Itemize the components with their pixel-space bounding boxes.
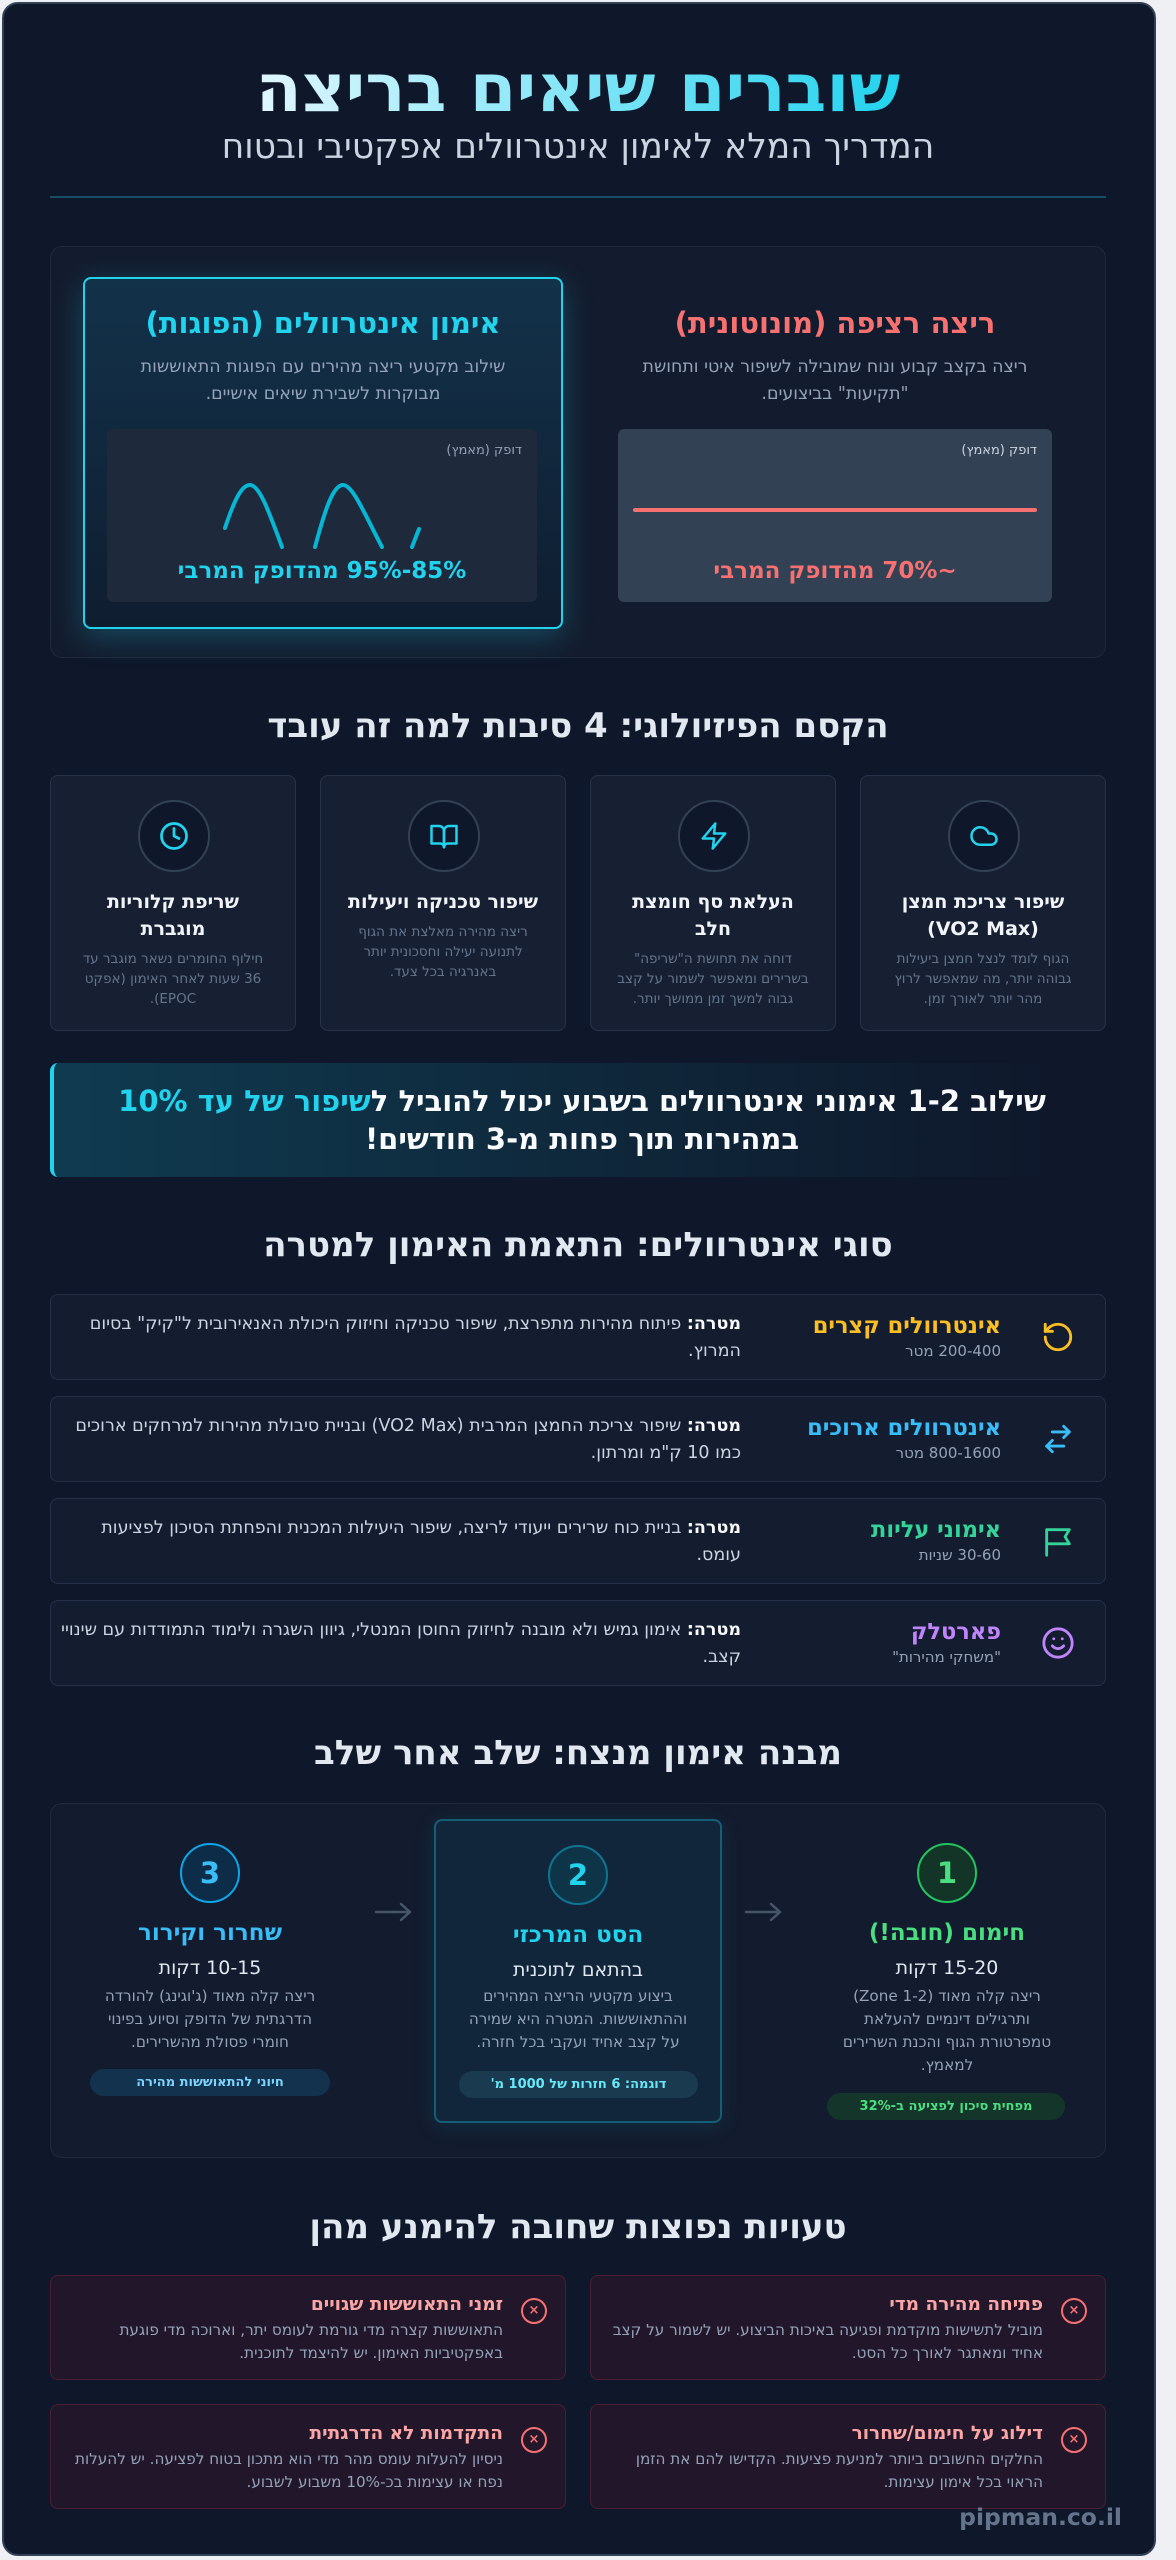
watermark: pipman.co.il — [959, 2503, 1122, 2531]
mistake: non-gradual progress: התקדמות לא הדרגתית — [310, 2423, 503, 2444]
text: 3 — [200, 1856, 220, 1890]
card: VO2 max: גבוהה יותר, מה שמאפשר לרוץ — [895, 971, 1071, 987]
row: long intervals — [50, 1396, 1106, 1482]
card: lactate threshold: גבוה למשך זמן ממושך יותר. — [633, 991, 793, 1007]
card: interval training — [83, 277, 563, 629]
mistake: skipping warm-up: החלקים החשובים ביותר למניעת פציעות. הקדישו להם את הזמן — [636, 2450, 1043, 2468]
subtitle: המדריך המלא לאימון אינטרוולים אפקטיבי ובטוח — [222, 127, 934, 167]
text: מפחית סיכון לפציעה ב-32% — [860, 2099, 1032, 2114]
middle step highlight — [434, 1819, 722, 2123]
mistake: non-gradual progress: ניסיון להעלות עומס מהר מדי הוא מתכון בטוח לפציעה. יש להעלות — [75, 2450, 503, 2468]
mistake: too fast start: × — [1069, 2303, 1079, 2318]
row: short intervals — [50, 1294, 1106, 1380]
card: lactate threshold: העלאת סף חומצת — [632, 891, 794, 913]
row: hills: 30-60 שניות — [919, 1546, 1001, 1564]
mistake: too fast start: פתיחה מהירה מדי — [889, 2294, 1043, 2315]
callout banner: במהירות תוך פחות מ-3 חודשים! — [365, 1122, 799, 1156]
card: VO2 max: הגוף לומד לנצל חמצן ביעילות — [897, 951, 1069, 967]
mistake: wrong recovery: × — [529, 2303, 539, 2318]
mistake: too fast start — [590, 2275, 1106, 2380]
card: VO2 max: שיפור צריכת חמצן — [902, 891, 1064, 913]
row: fartlek: מטרה: אימון גמיש ולא מובנה לחיזוק החוסן המנטלי, גיוון השגרה ולימוד התמודדות עם שינויי — [61, 1620, 741, 1640]
text: ריצה קלה מאוד (Zone 1-2) — [853, 1987, 1041, 2005]
card: lactate threshold: בשרירים ומאפשר לשמור על קצב — [617, 971, 809, 987]
text: דוגמה: 6 חזרות של 1000 מ' — [491, 2077, 666, 2092]
arrow 1 — [744, 1902, 782, 1922]
mistake: skipping warm-up: הראוי בכל אימון עצימות. — [884, 2473, 1043, 2491]
continuous description: "תקיעות" בביצועים. — [761, 384, 909, 404]
heading: workout structure: מבנה אימון מנצח: שלב אחר שלב — [314, 1733, 842, 1773]
row: hills — [50, 1498, 1106, 1584]
text: חומרי פסולת מהשרירים. — [131, 2033, 289, 2051]
mistake: skipping warm-up: × — [1069, 2432, 1079, 2447]
row: fartlek: "משחקי מהירות" — [892, 1648, 1001, 1666]
text: למאמץ. — [921, 2056, 973, 2074]
mistake: non-gradual progress — [50, 2404, 566, 2509]
interval description: שילוב מקטעי ריצה מהירים עם הפוגות התאוששות — [141, 357, 505, 377]
mistake: too fast start: מוביל לתשישות מוקדמת ופגיעה באיכות הביצוע. יש לשמור על קצב — [613, 2321, 1043, 2339]
heading: mistakes: טעויות נפוצות שחובה להימנע מהן — [309, 2207, 847, 2247]
card: calories: שריפת קלוריות — [107, 891, 239, 913]
chart: steady pulse: ~70% מהדופק המרבי — [713, 558, 957, 584]
card: technique: שיפור טכניקה ויעילות — [348, 891, 538, 913]
card: lactate threshold — [590, 775, 836, 1031]
card: technique: באנרגיה בכל צעד. — [390, 964, 496, 980]
mistake: skipping warm-up: דילוג על חימום/שחרור — [852, 2423, 1043, 2444]
row: short intervals: אינטרוולים קצרים — [813, 1313, 1001, 1339]
text: וההתאוששות. המטרה היא שמירה — [469, 2010, 687, 2028]
chart: interval pulse — [107, 429, 537, 602]
card: VO2 max: (VO2 Max) — [927, 918, 1039, 940]
heading: interval types: סוגי אינטרוולים: התאמת האימון למטרה — [263, 1225, 893, 1265]
heading: physiology: הקסם הפיזיולוגי: 4 סיבות למה זה עובד — [267, 706, 889, 746]
mistake: wrong recovery: התאוששות קצרה מדי גורמת לעומס יתר, וארוכה מדי פוגעת — [119, 2321, 503, 2339]
text: הסט המרכזי — [513, 1922, 643, 1948]
callout banner: שילוב 1-2 אימוני אינטרוולים בשבוע יכול להוביל לשיפור של עד 10% — [118, 1084, 1046, 1118]
row: fartlek: פארטלק — [911, 1619, 1001, 1645]
text: ותרגילים דינמיים להעלאת — [864, 2010, 1030, 2028]
text: 2 — [568, 1858, 588, 1892]
callout banner — [50, 1063, 1080, 1177]
continuous title: ריצה רציפה (מונוטונית) — [675, 306, 995, 340]
row: fartlek: קצב. — [703, 1647, 741, 1667]
row: long intervals: 800-1600 מטר — [896, 1444, 1001, 1462]
mistake: wrong recovery — [50, 2275, 566, 2380]
text: ביצוע מקטעי הריצה המהירים — [483, 1987, 673, 2005]
text: 1 — [937, 1856, 957, 1890]
row: hills: עומס. — [696, 1545, 741, 1565]
step 3: cool-down — [90, 1843, 330, 2096]
card: lactate threshold: חלב — [695, 918, 731, 940]
card: calories: EPOC). — [150, 991, 196, 1007]
text: חיוני להתאוששות מהירה — [136, 2075, 284, 2090]
card: calories: 36 שעות לאחר האימון (אפקט — [85, 971, 261, 987]
mistake: non-gradual progress: × — [529, 2432, 539, 2447]
text: 15-20 דקות — [896, 1957, 998, 1979]
title: שוברים שיאים בריצה — [256, 49, 900, 127]
interval description: מבוקרות לשבירת שיאים אישיים. — [206, 384, 440, 404]
card: calories — [50, 775, 296, 1031]
card: VO2 max — [860, 775, 1106, 1031]
row: hills: אימוני עליות — [871, 1517, 1001, 1543]
card: technique — [320, 775, 566, 1031]
text: בהתאם לתוכנית — [513, 1959, 643, 1981]
mistake: non-gradual progress: נפח או עצימות בכ-10% משבוע לשבוע. — [247, 2473, 503, 2491]
chart: interval pulse: דופק (מאמץ) — [446, 443, 522, 458]
card: calories: מוגברת — [141, 918, 205, 940]
card: VO2 max: מהר יותר לאורך זמן. — [924, 991, 1042, 1007]
mistake: wrong recovery: זמני התאוששות שגויים — [311, 2294, 503, 2315]
mistake: too fast start: אחיד ומאתגר לאורך כל הסט. — [852, 2344, 1043, 2362]
panel: comparison — [50, 246, 1106, 658]
mistake: wrong recovery: באפקטיביות האימון. יש להיצמד לתוכנית. — [239, 2344, 503, 2362]
row: short intervals: 200-400 מטר — [905, 1342, 1001, 1360]
step 1: warm-up — [827, 1843, 1065, 2120]
text: הדרגתית של הדופק וסיוע בפינוי — [108, 2010, 312, 2028]
card: calories: חילוף החומרים נשאר מוגבר עד — [83, 951, 263, 967]
text: 10-15 דקות — [159, 1957, 261, 1979]
card: continuous running — [618, 306, 1052, 602]
panel: steps — [50, 1803, 1106, 2158]
row: hills: מטרה: בניית כוח שרירים ייעודי לריצה, שיפור היעילות המכנית והפחתת הסיכון לפציעות — [101, 1518, 741, 1538]
card: technique: ריצה מהירה מאלצת את הגוף — [358, 924, 528, 940]
text: שחרור וקירור — [138, 1920, 282, 1946]
continuous description: ריצה בקצב קבוע ונוח שמובילה לשיפור איטי ותחושת — [643, 357, 1027, 377]
card: lactate threshold: דוחה את תחושת ה"שריפה" — [634, 951, 792, 967]
row: fartlek — [50, 1600, 1106, 1686]
interval title: אימון אינטרוולים (הפוגות) — [145, 306, 501, 340]
row: short intervals: המרוץ. — [688, 1341, 741, 1361]
chart: steady pulse — [618, 429, 1052, 602]
chart: steady pulse: דופק (מאמץ) — [961, 443, 1037, 458]
interval description — [140, 357, 505, 404]
text: ריצה קלה מאוד (ג'וגינג) להורדה — [105, 1987, 315, 2005]
mistake: skipping warm-up — [590, 2404, 1106, 2509]
continuous description — [642, 357, 1027, 404]
arrow 2 — [374, 1902, 412, 1922]
card: technique: לתנועה יעילה וחסכונית יותר — [363, 944, 523, 960]
row: long intervals: כמו 10 ק"מ ומרתון. — [591, 1443, 741, 1463]
text: חימום (חובה!) — [869, 1920, 1025, 1946]
row: long intervals: מטרה: שיפור צריכת החמצן המרבית (VO2 Max) ובניית סיבולת מהירות למרחקים ארוכים — [75, 1416, 741, 1436]
row: short intervals: מטרה: פיתוח מהירות מתפרצת, שיפור טכניקה וחיזוק היכולת האנאירובית ל"קיק" בסיום — [90, 1314, 741, 1334]
text: על קצב אחיד ועקבי בכל חזרה. — [476, 2033, 680, 2051]
step 2: main set — [459, 1845, 698, 2098]
chart: interval pulse: 85%-95% מהדופק המרבי — [178, 558, 466, 584]
row: long intervals: אינטרוולים ארוכים — [807, 1415, 1001, 1441]
text: טמפרטורת הגוף והכנת השרירים — [843, 2033, 1051, 2051]
